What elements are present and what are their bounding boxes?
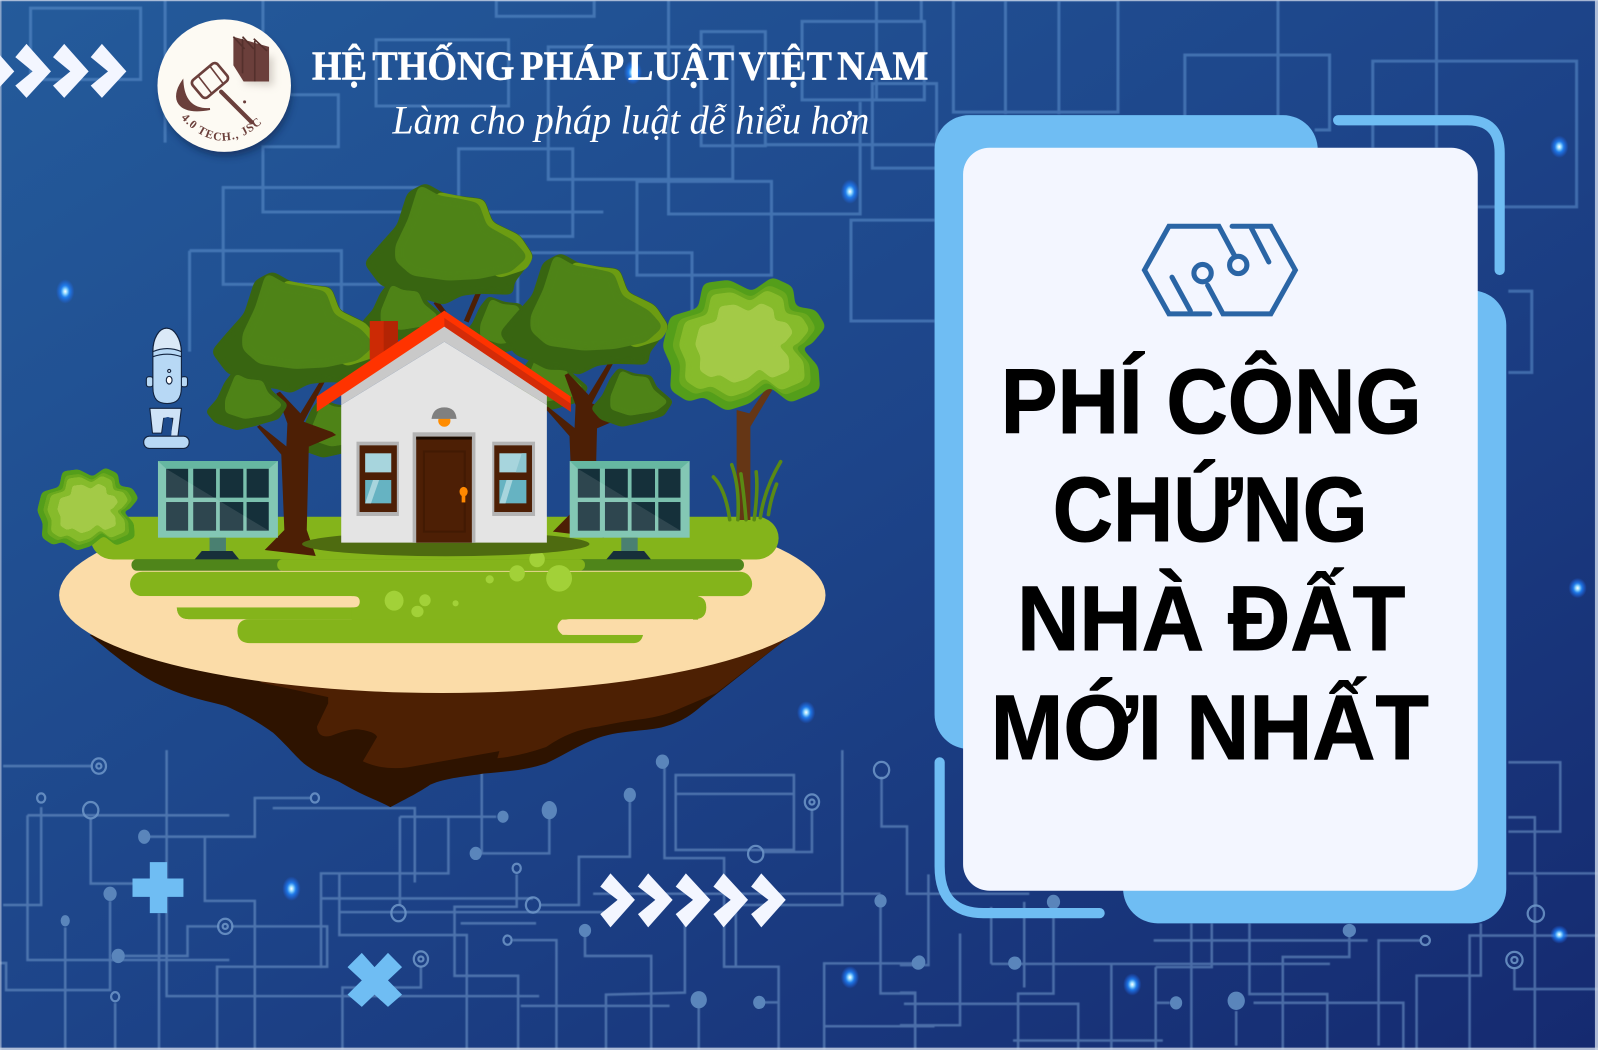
background circuit rectangles <box>31 0 1577 372</box>
top-left chevrons <box>0 44 126 98</box>
island soil <box>90 635 789 807</box>
main title: CHỨNG <box>1053 459 1368 561</box>
right solar panel <box>570 461 690 559</box>
header tagline: Làm cho pháp luật dễ hiểu hơn <box>391 99 869 143</box>
cross icon <box>348 953 402 1007</box>
main title: MỚI NHẤT <box>991 677 1429 779</box>
left tree <box>208 275 378 556</box>
center tree <box>368 186 530 322</box>
back panel top-left <box>935 115 1318 749</box>
roof <box>317 311 571 412</box>
header title: HỆ THỐNG PHÁP LUẬT VIỆT NAM <box>312 41 928 89</box>
icon: gavel <box>177 61 252 122</box>
bracket top-right <box>1338 120 1500 270</box>
light green tree <box>663 277 826 520</box>
right window <box>492 442 535 516</box>
lamp <box>432 407 457 427</box>
house shadow <box>302 532 589 556</box>
white card <box>963 148 1478 891</box>
grass tuft <box>713 462 781 520</box>
small bush <box>37 468 138 550</box>
main title: PHÍ CÔNG <box>1001 351 1422 453</box>
grass <box>91 517 779 643</box>
house <box>317 311 571 543</box>
icon: microphone <box>144 328 189 448</box>
background circuit traces <box>0 750 1598 1050</box>
right tree <box>503 257 671 538</box>
chimney <box>370 321 398 360</box>
island sand <box>59 547 826 693</box>
icon: books <box>233 37 273 86</box>
icon: circuit hexagon <box>1144 226 1295 314</box>
logo badge <box>157 19 296 160</box>
bottom chevrons <box>600 873 786 927</box>
door <box>413 432 475 543</box>
plus icon <box>132 862 183 913</box>
left window <box>356 442 399 516</box>
main title: NHÀ ĐẤT <box>1017 568 1405 670</box>
floating island illustration <box>37 186 826 807</box>
logo caption: 4.0 TECH., JSC <box>182 115 262 141</box>
back panel bottom-right <box>1123 290 1506 923</box>
panel: title card <box>935 115 1506 923</box>
circuit nodes <box>61 755 1356 1010</box>
left solar panel <box>158 461 278 559</box>
small canopies behind the house <box>295 285 586 456</box>
bracket bottom-left <box>940 762 1100 913</box>
main title <box>991 351 1429 779</box>
